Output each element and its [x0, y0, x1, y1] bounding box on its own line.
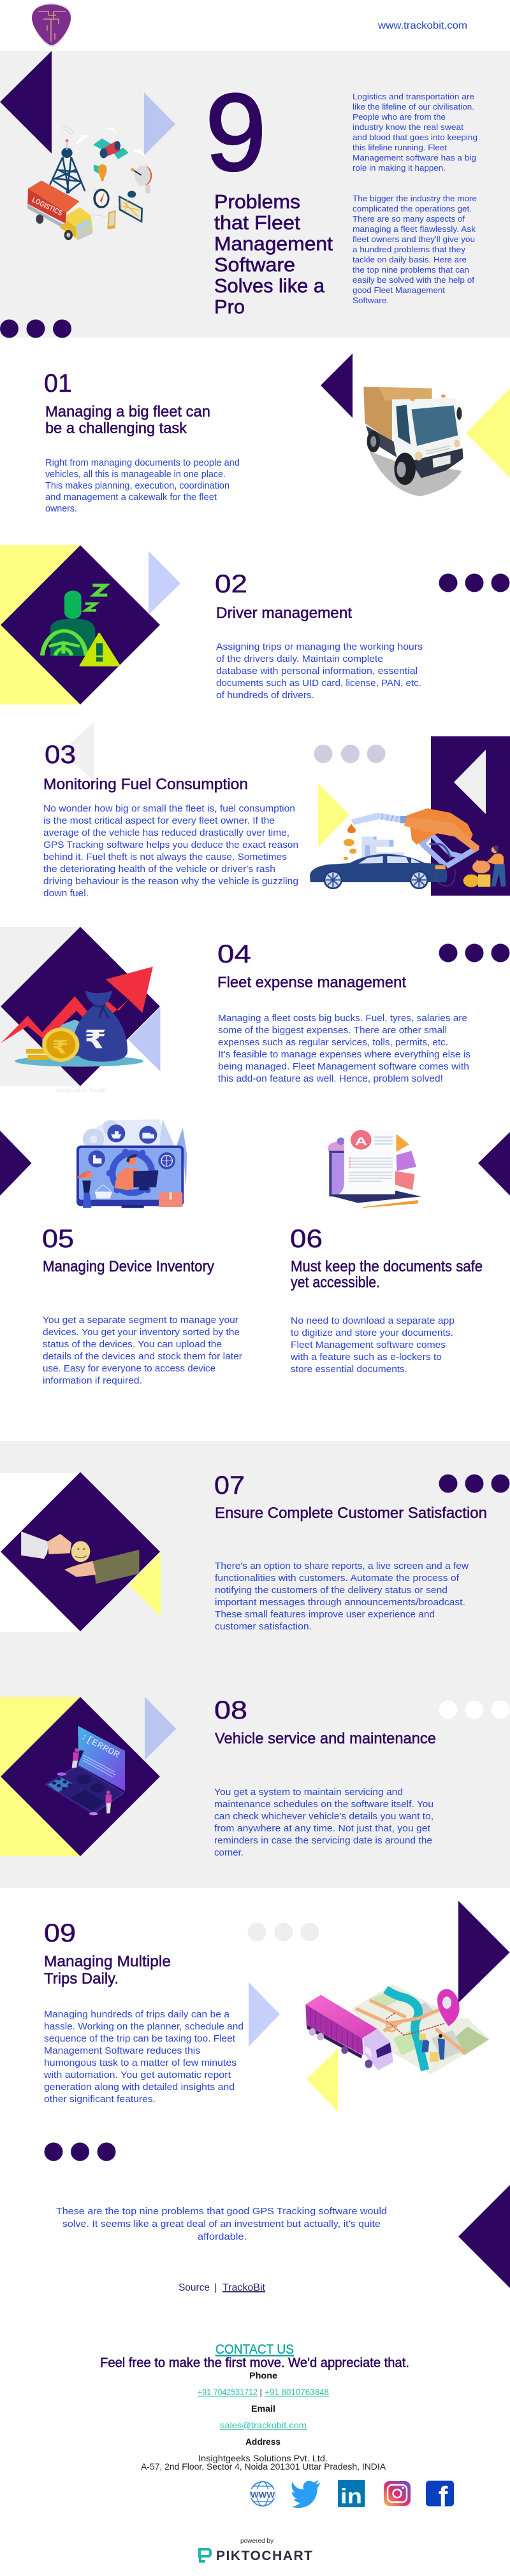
couriers — [422, 2037, 429, 2052]
icon: instagram — [384, 2481, 411, 2506]
closing statement: solve. It seems like a great deal of an investment but actually, it's quite — [62, 2219, 381, 2229]
three dots — [439, 1474, 510, 1493]
body 06: with a feature such as e-lockers to — [290, 1352, 442, 1363]
yellow block — [0, 545, 80, 705]
title — [214, 190, 333, 318]
hero background — [0, 51, 510, 338]
pale triangle — [454, 750, 486, 814]
intro paragraph 1: People who are from the — [353, 112, 446, 122]
illustration: money bag and rising arrow: ₹ — [52, 1036, 69, 1058]
GPS device — [119, 196, 143, 223]
title: Problems — [214, 190, 300, 213]
illustration: logistics truck and tracking icons: LOGISTICS — [31, 196, 64, 217]
body 04: Managing a fleet costs big bucks. Fuel, tyres, salaries are — [218, 1013, 467, 1024]
heading 08: Vehicle service and maintenance — [215, 1730, 436, 1747]
handle — [420, 834, 463, 857]
yellow triangle — [318, 784, 349, 847]
yellow triangle — [466, 388, 510, 478]
body 09: Managing hundreds of trips daily can be a — [44, 2010, 230, 2020]
body 09: with automation. You get automatic report — [43, 2070, 231, 2080]
panel: problem 01 — [44, 354, 510, 514]
phone numbers: +91 7042531712 — [198, 2387, 258, 2397]
periwinkle triangle — [144, 92, 175, 155]
three dots — [45, 2143, 116, 2161]
body 01: and management a cakewalk for the fleet — [45, 492, 217, 503]
nozzle body — [404, 808, 479, 852]
body 09: other significant features. — [44, 2094, 156, 2105]
intro paragraph 2: Software. — [353, 296, 389, 305]
heading 02: Driver management — [216, 605, 352, 622]
header — [32, 3, 467, 47]
illustration: laptop error screen — [46, 1725, 126, 1815]
title: Software — [214, 254, 295, 276]
icon: www globe: WWW — [251, 2490, 275, 2500]
icon: piktochart mark — [200, 2549, 210, 2561]
yellow triangle — [307, 2049, 338, 2112]
body 09: generation along with detailed insights and — [44, 2082, 235, 2093]
basket — [94, 1192, 112, 1199]
body 09 — [43, 2010, 244, 2105]
technician on ladder — [72, 1750, 84, 1768]
dark triangle — [478, 1132, 510, 1196]
phone label: Phone — [249, 2370, 277, 2380]
diamond — [1, 545, 160, 705]
source line: Source — [178, 2282, 210, 2293]
illustration: laptop error screen: :[ERROR — [79, 1732, 122, 1761]
illustration: truck and route map — [305, 1984, 490, 2075]
dark panel — [431, 736, 510, 896]
car — [310, 854, 448, 882]
intro paragraph 1: this lifeline running. Fleet — [353, 143, 447, 152]
hose — [351, 813, 400, 825]
illustration: delivery truck — [363, 387, 463, 496]
title: Solves like a — [214, 275, 325, 297]
body 03 — [43, 804, 298, 899]
truck — [27, 204, 66, 229]
heading 01: be a challenging task — [45, 420, 187, 437]
phone — [107, 210, 116, 229]
technician standing — [106, 1791, 110, 1794]
body 03: average of the vehicle has reduced drastically over time, — [43, 828, 289, 838]
dark triangle — [458, 1901, 510, 2003]
heading 05: Managing Device Inventory — [43, 1258, 214, 1275]
icon: twitter — [291, 2480, 320, 2508]
body 02 — [216, 642, 423, 701]
body 05 — [43, 1315, 242, 1386]
yellow triangle — [129, 1552, 161, 1617]
intro paragraph 2: easily be solved with the help of — [353, 275, 474, 285]
body 08: reminders in case the servicing date is around the — [214, 1836, 432, 1846]
yellow block — [0, 1697, 80, 1856]
watermark: designed by freepik — [56, 1087, 108, 1093]
body 06 — [290, 1316, 455, 1375]
icon: drowsy driver warning — [42, 585, 119, 666]
phone numbers — [198, 2387, 329, 2397]
email label: Email — [251, 2403, 275, 2414]
body 06: Fleet Management software comes — [291, 1340, 446, 1350]
body 03: behind it. Fuel theft is not always the cause. Sometimes — [43, 852, 287, 862]
drops — [347, 824, 356, 833]
map — [352, 1984, 490, 2075]
heading 03: Monitoring Fuel Consumption — [43, 776, 248, 793]
three dots — [0, 320, 71, 338]
number 05: 05 — [42, 1225, 74, 1253]
body 01: This makes planning, execution, coordination — [45, 481, 229, 491]
periwinkle triangle — [128, 1007, 161, 1071]
body 06: store essential documents. — [291, 1364, 407, 1375]
box — [159, 1192, 182, 1207]
intro paragraph 1 — [353, 92, 477, 173]
address label: Address — [245, 2436, 280, 2447]
body 07: There's an option to share reports, a live screen and a few — [215, 1561, 469, 1571]
number 02: 02 — [215, 570, 247, 598]
body 01: owners. — [45, 504, 77, 514]
contact heading: CONTACT US — [215, 2342, 294, 2357]
heading 09: Managing Multiple — [44, 1953, 171, 1970]
number 06: 06 — [290, 1225, 323, 1253]
icon: www globe — [251, 2482, 275, 2506]
icon: linkedin — [338, 2480, 365, 2508]
woman — [492, 847, 498, 853]
station — [361, 836, 404, 858]
body 05: devices. You get your inventory sorted by the — [43, 1327, 240, 1338]
body 06: to digitize and store your documents. — [291, 1328, 453, 1338]
body 08: maintenance schedules on the software itself. You — [214, 1800, 433, 1810]
body 04: being managed. Fleet Management software comes with — [218, 1062, 469, 1072]
body 01 — [45, 458, 240, 514]
intro paragraph 1: industry know the real sweat — [353, 122, 463, 132]
intro paragraph 2 — [353, 194, 477, 305]
heading 04: Fleet expense management — [217, 974, 406, 991]
intro paragraph 2: good Fleet Management — [353, 285, 445, 295]
periwinkle triangle — [249, 1982, 280, 2047]
panel: problem 02 — [0, 545, 510, 705]
intro paragraph 2: managing a fleet flawlessly. Ask — [353, 224, 476, 234]
woman — [77, 1171, 91, 1178]
number 04: 04 — [217, 940, 251, 968]
grey band for problems 07 and 08 — [0, 1441, 510, 1888]
panel: problem 03 — [43, 722, 510, 899]
heading 01 — [45, 403, 210, 437]
body 02: Assigning trips or managing the working hours — [216, 642, 423, 652]
body 07: notifying the customers of the delivery status or send — [215, 1585, 448, 1596]
intro paragraph 1: like the lifeline of our civilisation. — [353, 102, 474, 111]
body 01: Right from managing documents to people and — [45, 458, 240, 468]
source line — [178, 2282, 266, 2293]
body 09: hassle. Working on the planner, schedule and — [44, 2022, 244, 2032]
dish — [135, 165, 152, 186]
heading 06: Must keep the documents safe — [291, 1258, 483, 1275]
heading 09: Trips Daily. — [44, 1970, 119, 1987]
body 05: use. Easy for everyone to access device — [43, 1364, 215, 1374]
panel: problem 06 — [290, 1129, 510, 1375]
diamond — [1, 1697, 160, 1856]
intro paragraph 1: role in making it happen. — [353, 163, 446, 173]
number 01: 01 — [44, 369, 72, 397]
intro paragraph 1: and blood that goes into keeping — [353, 132, 477, 142]
operator — [115, 1168, 139, 1190]
body 08: can check whichever vehicle's details you want to, — [214, 1812, 433, 1822]
body 08: You get a system to maintain servicing and — [214, 1787, 403, 1798]
dark triangle — [321, 354, 353, 418]
body 07 — [215, 1561, 469, 1632]
body 02: database with personal information, essential — [216, 666, 418, 676]
number 07: 07 — [214, 1471, 245, 1499]
gear — [109, 1150, 155, 1196]
body 04 — [218, 1013, 470, 1084]
intro paragraph 1: Management software has a big — [353, 153, 476, 162]
illustration: money bag and rising arrow: ₹ — [84, 1025, 106, 1054]
diamond — [1, 1472, 160, 1631]
body 04: expenses such as regular services, tolls, permits, etc. — [218, 1038, 448, 1048]
illustration: fuel nozzle and car — [310, 808, 506, 889]
illustration: documents on laptop — [328, 1129, 421, 1208]
body 09: humongous task to a matter of few minutes — [44, 2058, 237, 2068]
number 08: 08 — [214, 1696, 247, 1724]
heading 01: Managing a big fleet can — [45, 403, 210, 420]
grey block — [0, 927, 80, 1086]
body 04: It's feasible to manage expenses where everything else is — [218, 1050, 470, 1060]
illustration: hands passing a smiley — [21, 1531, 139, 1584]
body 04: this add-on feature as well. Hence, problem solved! — [218, 1074, 443, 1084]
intro paragraph 2: the top nine problems that can — [353, 265, 469, 275]
body 07: functionalities with customers. Automate the process of — [215, 1573, 460, 1584]
dark triangle — [458, 2185, 510, 2288]
panel: problem 07 — [0, 1471, 510, 1632]
pale triangle — [61, 722, 94, 782]
body 07: These small features improve user experience and — [215, 1610, 435, 1620]
pale dots — [314, 745, 385, 763]
body 04: some of the biggest expenses. There are other small — [218, 1026, 447, 1036]
dark triangle — [0, 51, 52, 154]
coins and piggy — [463, 875, 479, 887]
powered by: powered by — [240, 2537, 274, 2545]
website url: www.trackobit.com — [377, 20, 467, 31]
body 07: important messages through announcements/broadcast. — [215, 1598, 465, 1608]
pale dots — [247, 1922, 319, 1942]
map pin — [94, 164, 101, 174]
street address — [141, 2453, 386, 2472]
panel: hero — [0, 51, 510, 338]
illustration: documents on laptop: A — [354, 1134, 368, 1147]
body 08 — [214, 1787, 433, 1858]
body 03: the deteriorating health of the vehicle or driver's rash — [43, 864, 275, 875]
illustration: device inventory monitor — [76, 1119, 187, 1208]
body 05: You get a separate segment to manage your — [43, 1315, 238, 1326]
intro paragraph 2: There are so many aspects of — [353, 214, 465, 224]
contact tagline: Feel free to make the first move. We'd appreciate that. — [100, 2355, 409, 2370]
dark triangle — [0, 1131, 32, 1196]
body 03: driving behaviour is the reason why the vehicle is guzzling — [43, 877, 298, 887]
body 02: of the drivers daily. Maintain complete — [216, 654, 383, 664]
big numeral 9: 9 — [205, 71, 266, 194]
intro paragraph 2: fleet owners and they'll give you — [353, 234, 475, 244]
truck — [305, 1995, 377, 2038]
street address: Insightgeeks Solutions Pvt. Ltd. — [198, 2453, 328, 2463]
body 09: Management Software reduces this — [44, 2046, 200, 2056]
title: that Fleet — [214, 211, 300, 234]
icon: linkedin: in — [340, 2484, 362, 2508]
source line: TrackoBit — [222, 2282, 266, 2293]
intro paragraph 2: The bigger the industry the more — [353, 194, 477, 203]
pin — [437, 1989, 460, 2026]
diamond — [1, 927, 160, 1086]
body 09: sequence of the trip can be taxing too. Fleet — [44, 2034, 235, 2044]
icon: facebook: f — [439, 2481, 448, 2512]
email address: sales@trackobit.com — [220, 2420, 307, 2430]
body 08: from anywhere at any time. Not just that, you get — [214, 1824, 430, 1834]
white dots — [439, 1701, 510, 1719]
intro paragraph 2: a hundred problems that they — [353, 245, 466, 254]
piktochart wordmark: PIKTOCHART — [216, 2549, 312, 2563]
body 01: vehicles, all this is manageable in one place. — [45, 469, 226, 480]
body 06: No need to download a separate app — [291, 1316, 455, 1326]
three dots — [439, 944, 510, 962]
panel: closing — [45, 2143, 510, 2293]
closing statement — [56, 2206, 387, 2242]
closing statement: affordable. — [198, 2231, 247, 2242]
body 08: corner. — [214, 1848, 244, 1858]
tower — [50, 157, 85, 193]
illustration: logistics truck and tracking icons — [27, 126, 152, 240]
body 05: details of the devices and stock them for later — [43, 1352, 242, 1362]
phone numbers: | — [260, 2387, 262, 2397]
icon: TrackoBit logo — [32, 3, 71, 47]
illustration: money bag and rising arrow — [1, 967, 153, 1067]
panel: problem 09 — [43, 1901, 509, 2112]
phone numbers: +91 8010763848 — [265, 2387, 329, 2397]
closing statement: These are the top nine problems that good GPS Tracking software would — [56, 2206, 387, 2217]
number 03: 03 — [45, 741, 76, 769]
body 02: of hundreds of drivers. — [216, 691, 314, 701]
heading 09 — [44, 1953, 171, 1987]
body 02: documents such as UID card, license, PAN, etc. — [216, 678, 421, 689]
icon: facebook — [426, 2480, 454, 2512]
panel: contact — [100, 2342, 454, 2563]
title: Management — [214, 233, 333, 255]
heading 07: Ensure Complete Customer Satisfaction — [215, 1505, 487, 1522]
compass — [93, 189, 110, 208]
body 07: customer satisfaction. — [215, 1622, 312, 1632]
intro paragraph 1: Logistics and transportation are — [353, 92, 474, 101]
satellite — [93, 138, 113, 151]
title: Pro — [214, 296, 245, 318]
heading 06 — [291, 1258, 483, 1291]
body 05: status of the devices. You can upload the — [43, 1340, 222, 1350]
source line: | — [214, 2282, 217, 2293]
body 03: No wonder how big or small the fleet is, fuel consumption — [43, 804, 295, 814]
body 05: information if required. — [43, 1376, 142, 1386]
body 03: GPS Tracking software helps you deduce the exact reason — [43, 840, 298, 850]
panel: problem 08 — [0, 1696, 510, 1858]
body 03: is the most critical aspect for every fleet owner. If the — [43, 816, 275, 826]
periwinkle triangle — [149, 551, 180, 615]
street address: A-57, 2nd Floor, Sector 4, Noida 201301 Uttar Pradesh, INDIA — [141, 2461, 386, 2472]
white block — [0, 1473, 80, 1632]
heading 06: yet accessible. — [291, 1274, 380, 1291]
body 03: down fuel. — [43, 889, 89, 899]
panel: problem 05 — [0, 1119, 242, 1386]
number 09: 09 — [44, 1919, 76, 1947]
intro paragraph 2: tackle on daily basis. Here are — [353, 255, 467, 264]
periwinkle triangle — [145, 1697, 176, 1760]
intro paragraph 2: complicated the operations get. — [353, 204, 472, 213]
three dots — [439, 573, 510, 592]
panel: problem 04 — [0, 927, 510, 1093]
